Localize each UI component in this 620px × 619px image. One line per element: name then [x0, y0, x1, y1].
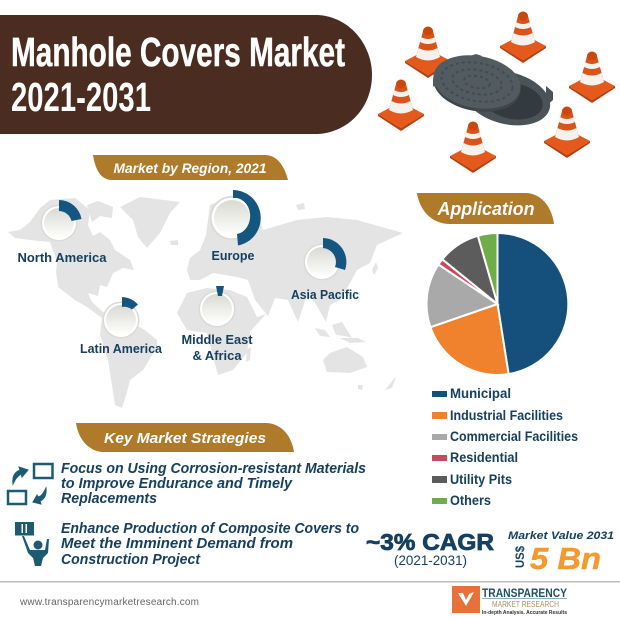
legend: application: [432, 386, 578, 508]
donut: latin america: Latin America: [80, 341, 163, 356]
banner: key market strategies: Key Market Strategies: [104, 430, 266, 447]
statistic: market value 2031: Market Value 2031: [508, 530, 614, 542]
legend: application: Municipal: [450, 386, 511, 401]
donut: europe: Europe: [212, 248, 254, 263]
donut: europe: [210, 190, 261, 263]
donut: north america: [18, 200, 107, 265]
donut: latin america: [80, 297, 163, 356]
donut: middle east and africa: [182, 286, 253, 363]
banner: application: Application: [437, 199, 535, 219]
title banner: [0, 15, 372, 134]
statistic: market value 2031: 5 Bn: [530, 541, 601, 576]
banner: market by region: [93, 155, 288, 180]
legend: application: Others: [450, 493, 491, 508]
logo: transparency market research: TRANSPARENCY: [482, 586, 567, 600]
icon: exchange arrows between squares: [8, 464, 52, 504]
legend: application: Commercial Facilities: [450, 429, 578, 444]
legend: application: Residential: [450, 450, 518, 465]
statistic: CAGR: [366, 529, 494, 568]
strategy text: corrosion-resistant materials: [61, 461, 366, 507]
donut: middle east and africa: Middle East: [182, 332, 253, 347]
statistic: market value 2031: US$: [513, 546, 527, 568]
donut: north america: North America: [18, 250, 107, 265]
banner: key market strategies: [76, 423, 294, 452]
title banner: 2021-2031: [11, 74, 151, 120]
logo: transparency market research: [452, 586, 567, 616]
footer divider: [0, 581, 620, 582]
strategy text: composite covers: Construction Project: [61, 552, 201, 568]
strategy text: composite covers: Meet the Imminent Demand from: [61, 536, 293, 552]
banner: market by region: Market by Region, 2021: [114, 160, 267, 176]
logo: transparency market research: In-depth Analysis. Accurate Results: [482, 610, 567, 616]
statistic: market value 2031: [508, 530, 614, 576]
banner: application: [417, 193, 554, 224]
donut: middle east and africa: & Africa: [192, 348, 242, 363]
statistic: CAGR: ~3% CAGR: [366, 529, 494, 555]
pie chart: application share: [427, 233, 568, 375]
logo: transparency market research: MARKET RESEARCH: [492, 600, 559, 609]
donut: asia pacific: [291, 238, 359, 302]
legend: application: Utility Pits: [450, 472, 512, 487]
illustration: manhole cover and traffic cones: [378, 12, 615, 173]
strategy text: corrosion-resistant materials: Replacements: [61, 491, 157, 507]
strategy text: composite covers: [61, 521, 359, 568]
legend: application: Industrial Facilities: [450, 408, 563, 423]
website url: www.transparencymarketresearch.com: [19, 597, 199, 608]
strategy text: corrosion-resistant materials: Focus on Using Corrosion-resistant Materials: [61, 461, 366, 477]
strategy text: composite covers: Enhance Production of Composite Covers to: [61, 521, 359, 537]
title banner: Manhole Covers Market: [11, 29, 345, 75]
statistic: CAGR: (2021-2031): [394, 552, 467, 568]
strategy text: corrosion-resistant materials: to Improve Endurance and Timely: [61, 476, 293, 492]
icon: person holding sign: [15, 522, 49, 566]
world map: [8, 196, 403, 408]
donut: asia pacific: Asia Pacific: [291, 287, 359, 302]
